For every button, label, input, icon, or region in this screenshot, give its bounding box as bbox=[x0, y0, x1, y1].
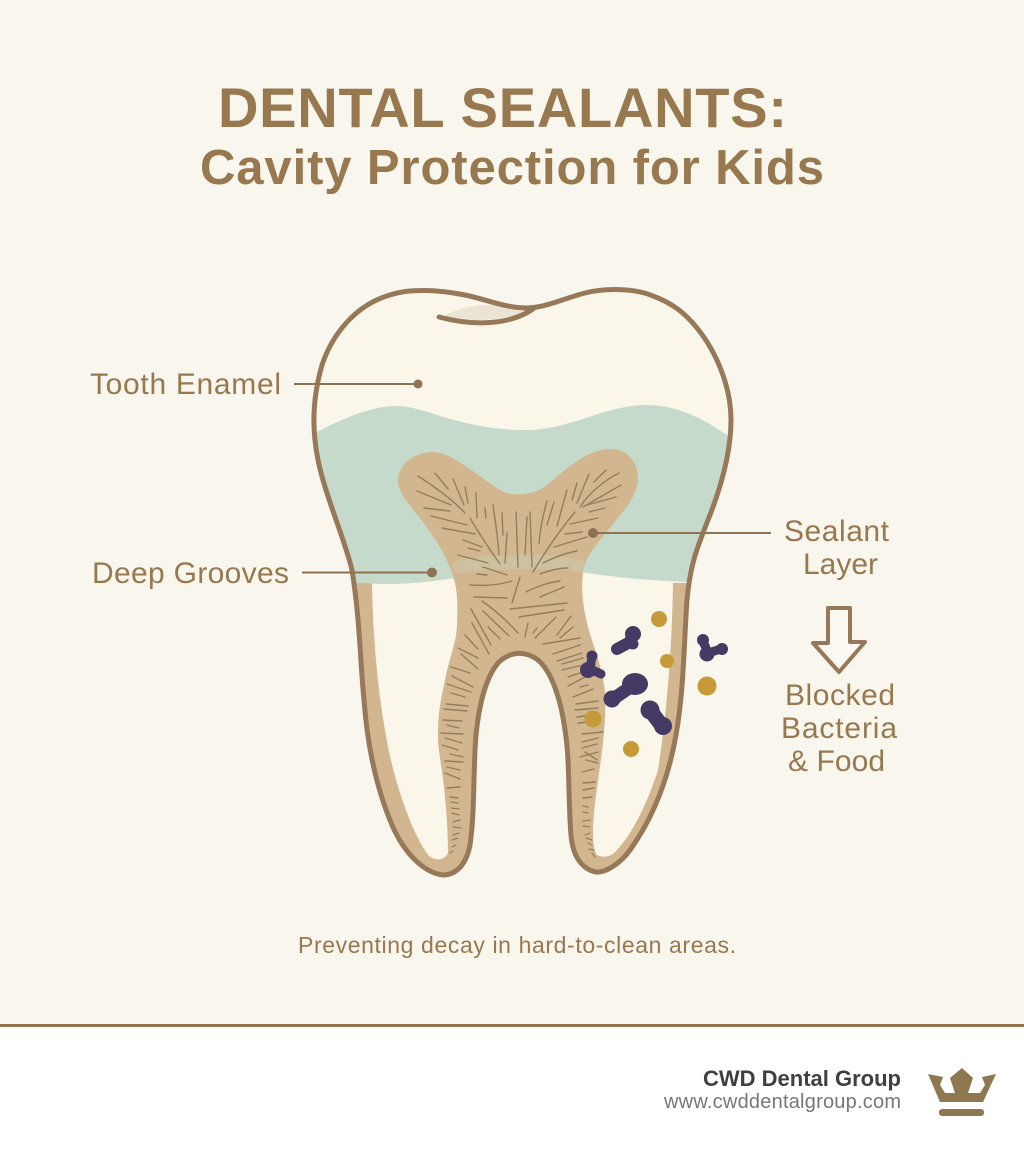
label: sealant layer bbox=[588, 515, 890, 581]
label: blocked bacteria and food: & Food bbox=[788, 745, 885, 778]
icon: crown logo bbox=[928, 1068, 996, 1116]
arrow bbox=[813, 608, 865, 672]
label: sealant layer: Layer bbox=[803, 548, 878, 581]
label: sealant layer: Sealant bbox=[784, 515, 890, 548]
caption: Preventing decay in hard-to-clean areas. bbox=[298, 932, 736, 958]
footer bbox=[0, 1024, 1024, 1154]
dentin hatch lines bbox=[417, 470, 621, 857]
label: blocked bacteria and food: Blocked bbox=[785, 679, 895, 712]
label: tooth enamel bbox=[90, 368, 422, 401]
tooth highlight bbox=[444, 305, 524, 320]
bacteria and food particles bbox=[580, 611, 728, 757]
company name: CWD Dental Group bbox=[703, 1066, 901, 1091]
label: blocked bacteria and food: Bacteria bbox=[781, 712, 897, 745]
label: blocked bacteria and food bbox=[781, 679, 897, 778]
bacteria bbox=[580, 626, 728, 735]
pulp with root canals bbox=[398, 449, 638, 900]
title: Cavity Protection for Kids bbox=[200, 141, 824, 195]
title bbox=[200, 76, 824, 195]
tooth outline bbox=[314, 290, 731, 875]
food particles bbox=[584, 611, 716, 757]
label: deep grooves: Deep Grooves bbox=[92, 557, 289, 590]
label: tooth enamel: Tooth Enamel bbox=[90, 368, 281, 401]
title: DENTAL SEALANTS: bbox=[218, 76, 787, 139]
occlusal fissure hook bbox=[439, 309, 533, 323]
label: deep grooves bbox=[92, 557, 437, 590]
tooth body bbox=[316, 304, 728, 872]
sealant layer bbox=[310, 405, 735, 584]
tooth diagram bbox=[300, 280, 740, 900]
website: www.cwddentalgroup.com bbox=[663, 1091, 901, 1113]
